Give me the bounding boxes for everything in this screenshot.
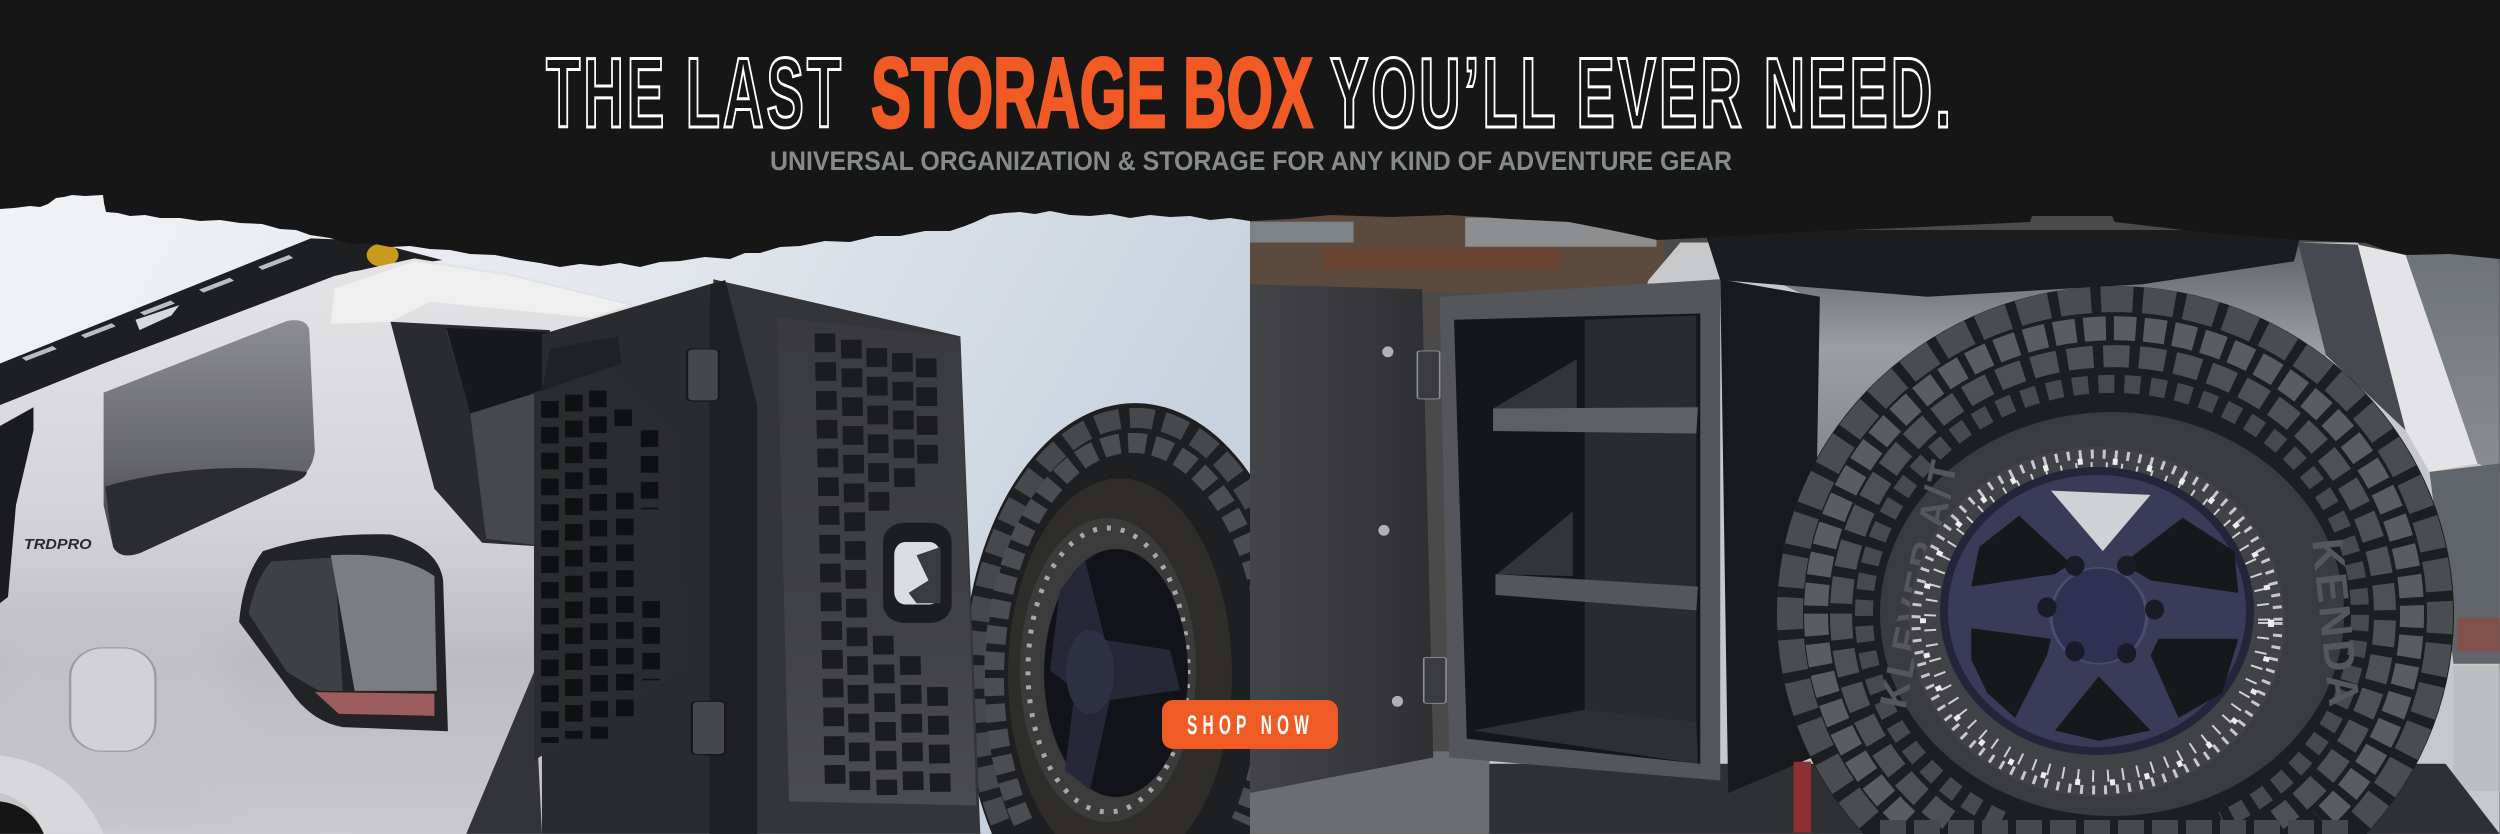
- spare tire: [1776, 286, 2454, 834]
- title: [546, 37, 1954, 148]
- tail red lens: [2457, 618, 2500, 651]
- title outline end: YOU’LL EVER NEED.: [1330, 37, 1954, 148]
- box edge groove: [709, 280, 757, 834]
- right taillight: [2430, 464, 2500, 664]
- red strap: [1794, 762, 1811, 833]
- white pillar: [2358, 245, 2477, 472]
- wheel face: [1944, 471, 2250, 751]
- upper gusset: [1493, 359, 1577, 409]
- side panel top bracket: [542, 336, 622, 391]
- right photo: open storage box and spare wheel: [1250, 180, 2500, 834]
- left spare tire: [970, 403, 1250, 834]
- spoiler highlight: [331, 261, 630, 324]
- ground: [1250, 751, 1490, 834]
- front molle panel: [777, 318, 976, 806]
- upper dark band: [1704, 230, 2302, 297]
- floor: [1473, 710, 1698, 764]
- back wall: [1585, 316, 1696, 726]
- front panel holes: [825, 333, 940, 795]
- bumper: [1489, 764, 2500, 834]
- side panel holes: [550, 391, 651, 743]
- fuel door: [70, 648, 155, 751]
- upper shelf: [1493, 407, 1698, 434]
- storage box side: [542, 284, 713, 834]
- subtitle: UNIVERSAL ORGANIZATION & STORAGE FOR ANY KIND OF ADVENTURE GEAR: [770, 146, 1732, 176]
- door hinges: [1417, 351, 1446, 703]
- quarter window: [104, 320, 315, 555]
- taillight: [239, 534, 448, 731]
- torn paper edge: [0, 0, 2500, 267]
- rear pillar and glass: [391, 322, 550, 547]
- truck side panel: [0, 258, 638, 834]
- storage box front: [713, 279, 980, 834]
- ring pattern: [1916, 454, 2278, 790]
- lower body: [2453, 666, 2500, 791]
- wheel windows and hub: [1971, 491, 2238, 741]
- wheel arch: [0, 755, 104, 834]
- steel pipes: [1250, 213, 1664, 293]
- rear glass: [1784, 242, 2326, 458]
- roof rack: [0, 238, 442, 405]
- shop now button: [1162, 700, 1338, 749]
- box interior: [1454, 313, 1700, 764]
- truck rear body: [1820, 514, 2394, 834]
- lower gusset: [1497, 512, 1573, 576]
- lower shelf: [1495, 574, 1698, 610]
- body shading: [0, 606, 239, 834]
- building at right: [2398, 251, 2500, 626]
- pillar: [2298, 243, 2406, 430]
- side door window: [0, 407, 33, 603]
- title outline start: THE LAST: [546, 37, 844, 148]
- truck rear: [1489, 243, 2500, 834]
- truck body: [0, 238, 980, 834]
- hub: [2051, 568, 2147, 664]
- lower shadow: [466, 672, 542, 834]
- beadlock ring: [1909, 447, 2285, 797]
- box frame: [1440, 279, 1720, 780]
- open door: [1250, 284, 1433, 793]
- sidewall lettering: KLEVER A/T: [1873, 454, 1967, 712]
- sidewall brand: KENDA: [2302, 536, 2369, 712]
- shop now button: SHOP NOW: [1187, 710, 1314, 740]
- sky: [0, 150, 1250, 834]
- TRD badge: TRDPRO: [24, 535, 92, 552]
- background yard: [1250, 180, 2500, 834]
- door bolts: [1378, 346, 1403, 707]
- title highlight: STORAGE BOX: [871, 37, 1313, 148]
- lug nuts: [2037, 556, 2164, 663]
- left photo: white truck with closed storage box: [0, 195, 1250, 834]
- side molle panel: [534, 390, 542, 759]
- box side wall: [1720, 279, 1820, 793]
- wheel well: [0, 801, 44, 834]
- door handle: [883, 523, 952, 623]
- hinges: [687, 349, 725, 755]
- sidewall: [1880, 412, 2344, 816]
